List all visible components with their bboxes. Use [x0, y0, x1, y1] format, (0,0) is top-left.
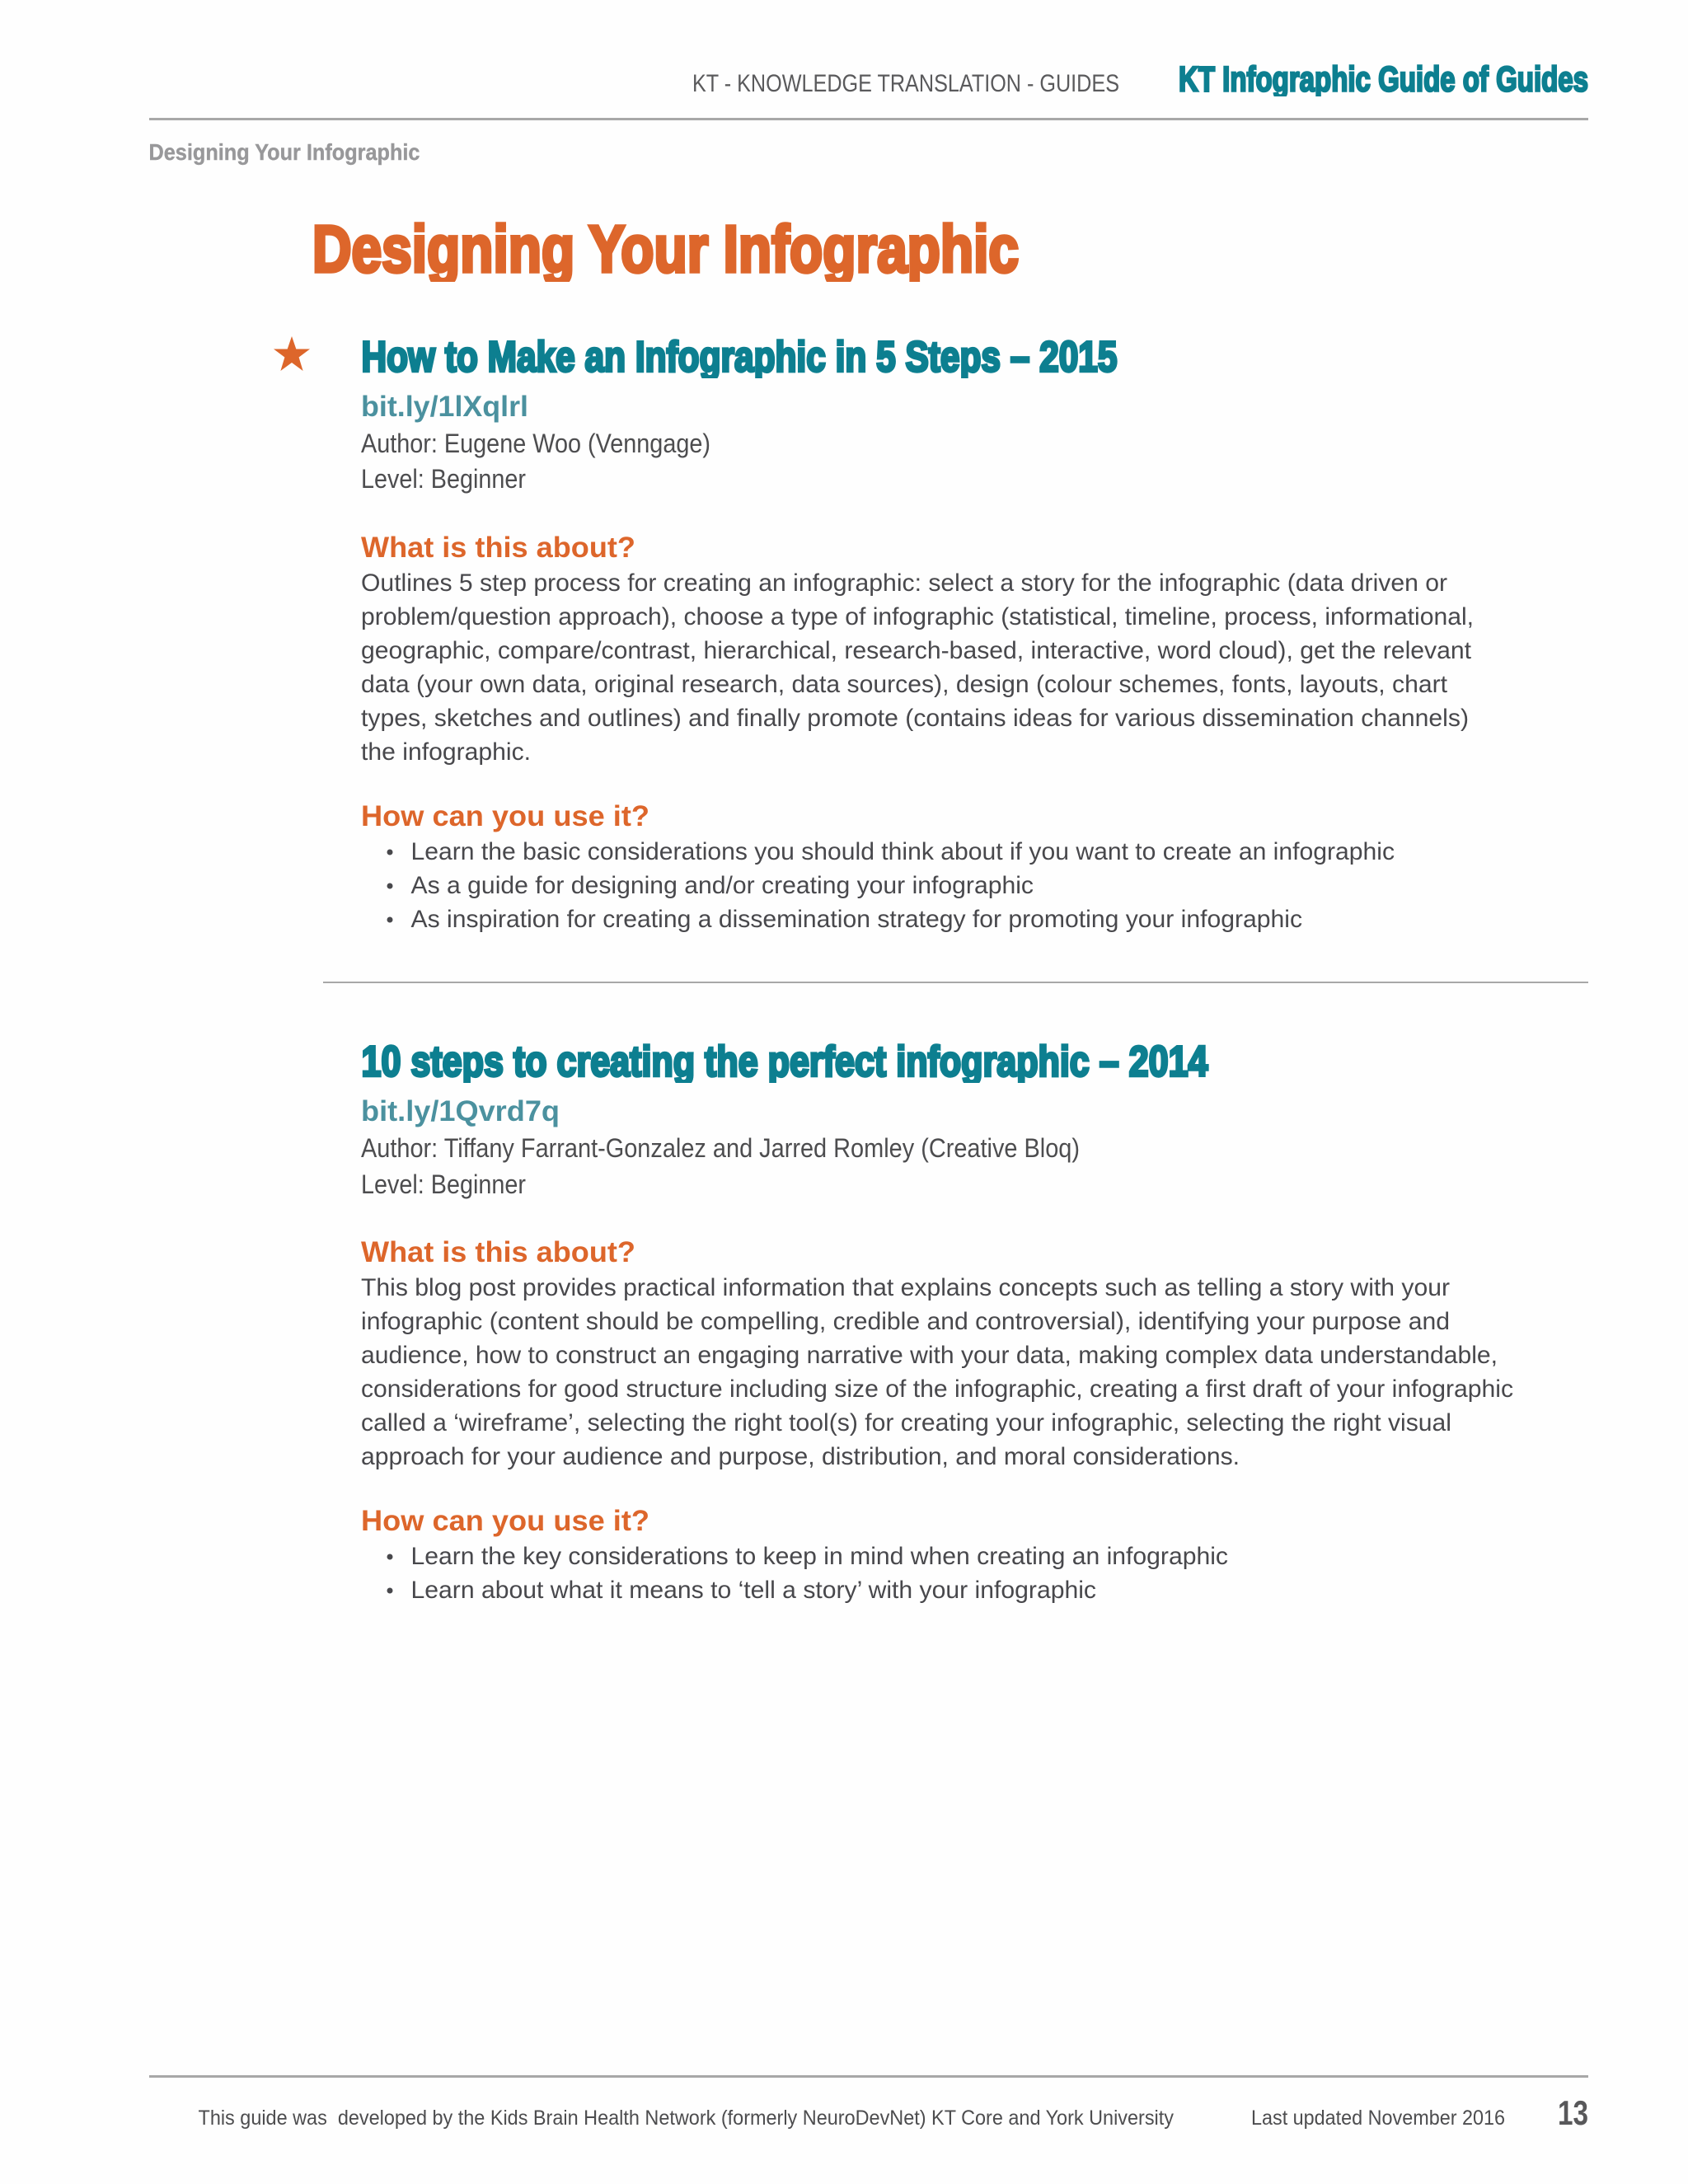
- guide 1 description: problem/question approach), choose a type of infographic (statistical, timeline, process, informational,: [361, 603, 1474, 630]
- guide 1 link: bit.ly/1lXqlrl: [361, 391, 528, 423]
- guide 2 description: considerations for good structure including size of the infographic, creating a first draft of your infographic: [361, 1376, 1513, 1403]
- page number: 13: [1558, 2093, 1588, 2132]
- header label: KT - KNOWLEDGE TRANSLATION - GUIDES: [692, 70, 1119, 97]
- page title: Designing Your Infographic: [312, 213, 1019, 285]
- panel: guide 1: [361, 334, 1474, 933]
- guide 1 level: Level: Beginner: [361, 464, 526, 494]
- guide 1 description: [361, 569, 1474, 766]
- guide 2 link: bit.ly/1Qvrd7q: [361, 1095, 560, 1127]
- guide 2 description: This blog post provides practical information that explains concepts such as telling a story with your: [361, 1274, 1450, 1301]
- running header: [694, 64, 1588, 96]
- guide 2 level: Level: Beginner: [361, 1169, 526, 1199]
- guide 2 what heading: What is this about?: [361, 1236, 635, 1268]
- guide 1 bullet list: Learn the basic considerations you should think about if you want to create an infographic: [410, 838, 1395, 865]
- guide 2 description: [361, 1274, 1513, 1470]
- guide 1 description: geographic, compare/contrast, hierarchical, research-based, interactive, word cloud), get the relevant: [361, 637, 1472, 664]
- guide 1 description: data (your own data, original research, data sources), design (colour schemes, fonts, layouts, chart: [361, 671, 1448, 698]
- guide 2 bullet list: Learn the key considerations to keep in mind when creating an infographic: [410, 1543, 1228, 1570]
- guide 1 description: types, sketches and outlines) and finally promote (contains ideas for various dissemination channels): [361, 705, 1469, 732]
- icon: star: [274, 336, 310, 371]
- footer: [198, 2093, 1588, 2132]
- guide 1 bullet list: As inspiration for creating a dissemination strategy for promoting your infographic: [410, 906, 1302, 933]
- guide 1 what heading: What is this about?: [361, 532, 635, 564]
- guide 2 bullet list: Learn about what it means to ‘tell a story’ with your infographic: [410, 1577, 1096, 1604]
- guide 2 heading: 10 steps to creating the perfect infographic – 2014: [361, 1038, 1208, 1086]
- guide 1 author: Author: Eugene Woo (Venngage): [361, 429, 710, 458]
- guide 1 heading: How to Make an Infographic in 5 Steps – 2015: [361, 334, 1118, 382]
- panel: guide 2: [361, 1038, 1513, 1604]
- guide 2 description: audience, how to construct an engaging narrative with your data, making complex data understandable,: [361, 1342, 1498, 1369]
- guide 2 description: infographic (content should be compelling, credible and controversial), identifying your purpose and: [361, 1308, 1450, 1335]
- guide 2 how heading: How can you use it?: [361, 1505, 649, 1537]
- guide 1 how heading: How can you use it?: [361, 800, 649, 832]
- guide 1 bullet list: As a guide for designing and/or creating your infographic: [410, 872, 1034, 899]
- guide 2 bullet list: [387, 1543, 1228, 1604]
- footer credit: This guide was developed by the Kids Brain Health Network (formerly NeuroDevNet) KT Core and York University: [198, 2107, 1174, 2130]
- guide 2 description: approach for your audience and purpose, distribution, and moral considerations.: [361, 1443, 1240, 1470]
- guide 2 description: called a ‘wireframe’, selecting the right tool(s) for creating your infographic, selecting the right visual: [361, 1409, 1451, 1436]
- guide 1 description: Outlines 5 step process for creating an infographic: select a story for the infographic (data driven or: [361, 569, 1447, 597]
- guide 1 description: the infographic.: [361, 738, 531, 766]
- section breadcrumb: Designing Your Infographic: [148, 139, 420, 165]
- guide 1 bullet list: [387, 838, 1395, 933]
- footer date: Last updated November 2016: [1251, 2107, 1505, 2130]
- guide 2 author: Author: Tiffany Farrant-Gonzalez and Jarred Romley (Creative Bloq): [361, 1133, 1080, 1163]
